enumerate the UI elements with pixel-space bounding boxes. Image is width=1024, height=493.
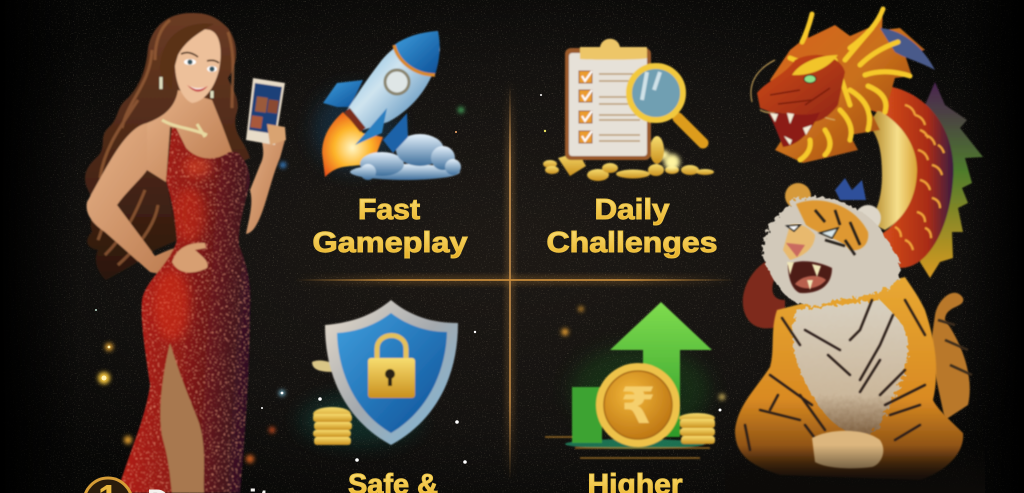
icon: rocket [322, 31, 461, 180]
neck and chest [147, 90, 232, 182]
orange forehead [796, 200, 868, 250]
white ruff [763, 197, 900, 305]
clouds [350, 134, 461, 180]
checklist [579, 71, 640, 143]
body [735, 277, 963, 480]
hair fringe [160, 23, 214, 90]
earrings [161, 77, 212, 98]
necklace [162, 120, 207, 137]
muzzle [783, 224, 815, 260]
clipboard board [565, 48, 651, 160]
head mane [770, 7, 925, 163]
green bar [572, 387, 602, 443]
body stripes [745, 300, 925, 450]
lower fin [355, 108, 387, 145]
rupee coin: ₹ [621, 377, 655, 435]
exhaust ring [347, 110, 363, 130]
green glow [565, 439, 705, 449]
figure: dragon [743, 7, 983, 328]
right coin stack [679, 413, 715, 444]
gold pile [543, 136, 714, 181]
exposed leg through slit [160, 343, 204, 493]
paper [569, 53, 647, 156]
right fin [383, 113, 408, 153]
padlock [368, 336, 415, 398]
fangs [770, 113, 812, 145]
heading: Fast Gameplay [312, 194, 468, 259]
ear right [855, 205, 881, 231]
left fin [323, 80, 363, 107]
snout lines [770, 88, 830, 105]
golden brow [792, 55, 838, 75]
white chest [793, 300, 908, 435]
flame [322, 112, 383, 177]
phone [246, 78, 285, 145]
back fins [920, 82, 983, 278]
eye [804, 75, 816, 83]
face stripes [815, 210, 860, 255]
star field [95, 94, 725, 464]
scaled body [870, 85, 953, 268]
bottom badge: number 1 coin [84, 477, 132, 493]
golden belly [868, 110, 917, 230]
shield frame [325, 300, 458, 445]
head [757, 55, 845, 122]
scale pattern [895, 105, 944, 250]
magnifier [678, 118, 703, 143]
left arm on hip [87, 123, 192, 274]
whiskers [751, 60, 835, 120]
heading: Fast Gameplay: Fast [358, 194, 420, 226]
bottom fade [725, 445, 985, 493]
icon: clipboard and magnifier [543, 39, 714, 181]
fingers on phone [267, 124, 286, 145]
shield face [337, 313, 447, 433]
ear left [785, 183, 811, 209]
lower tail coil [743, 262, 785, 328]
red dress [120, 127, 252, 493]
quadrant dividers [295, 80, 735, 480]
figure: tiger [725, 183, 985, 493]
icon: growth arrow and rupee coin [545, 302, 715, 458]
open mouth [788, 261, 832, 293]
blue crest [880, 28, 935, 70]
rupee coin [596, 363, 680, 447]
raised right arm [246, 122, 285, 234]
nose [394, 31, 440, 75]
ground streaks [545, 437, 710, 458]
front paw [812, 431, 883, 468]
clip [580, 39, 647, 60]
eyes and smile [181, 53, 219, 92]
fangs [787, 262, 821, 290]
open mouth [768, 112, 820, 147]
heading: Daily Challenges: Daily [594, 194, 670, 226]
icon: shield with padlock [312, 300, 458, 445]
nose [786, 243, 805, 257]
eyes [787, 225, 838, 238]
tail [930, 293, 970, 420]
tail stripes [938, 320, 972, 375]
face [175, 29, 221, 103]
tongue [795, 276, 826, 288]
hair [85, 13, 250, 280]
yellow mane strands [790, 9, 910, 160]
figure: woman in red dress holding a phone [85, 13, 286, 493]
hair highlights [98, 20, 233, 265]
heading: Daily Challenges [546, 194, 718, 259]
gold coin stack [313, 407, 352, 445]
heading: Daily Challenges: Challenges [546, 227, 718, 259]
arrow [610, 302, 712, 437]
body [347, 31, 440, 130]
heading: Fast Gameplay: Gameplay [312, 227, 468, 259]
hand on hip [172, 243, 208, 272]
window [385, 70, 409, 94]
band [394, 45, 435, 75]
blue tuft behind tiger [835, 178, 866, 200]
banner scroll [312, 360, 340, 372]
